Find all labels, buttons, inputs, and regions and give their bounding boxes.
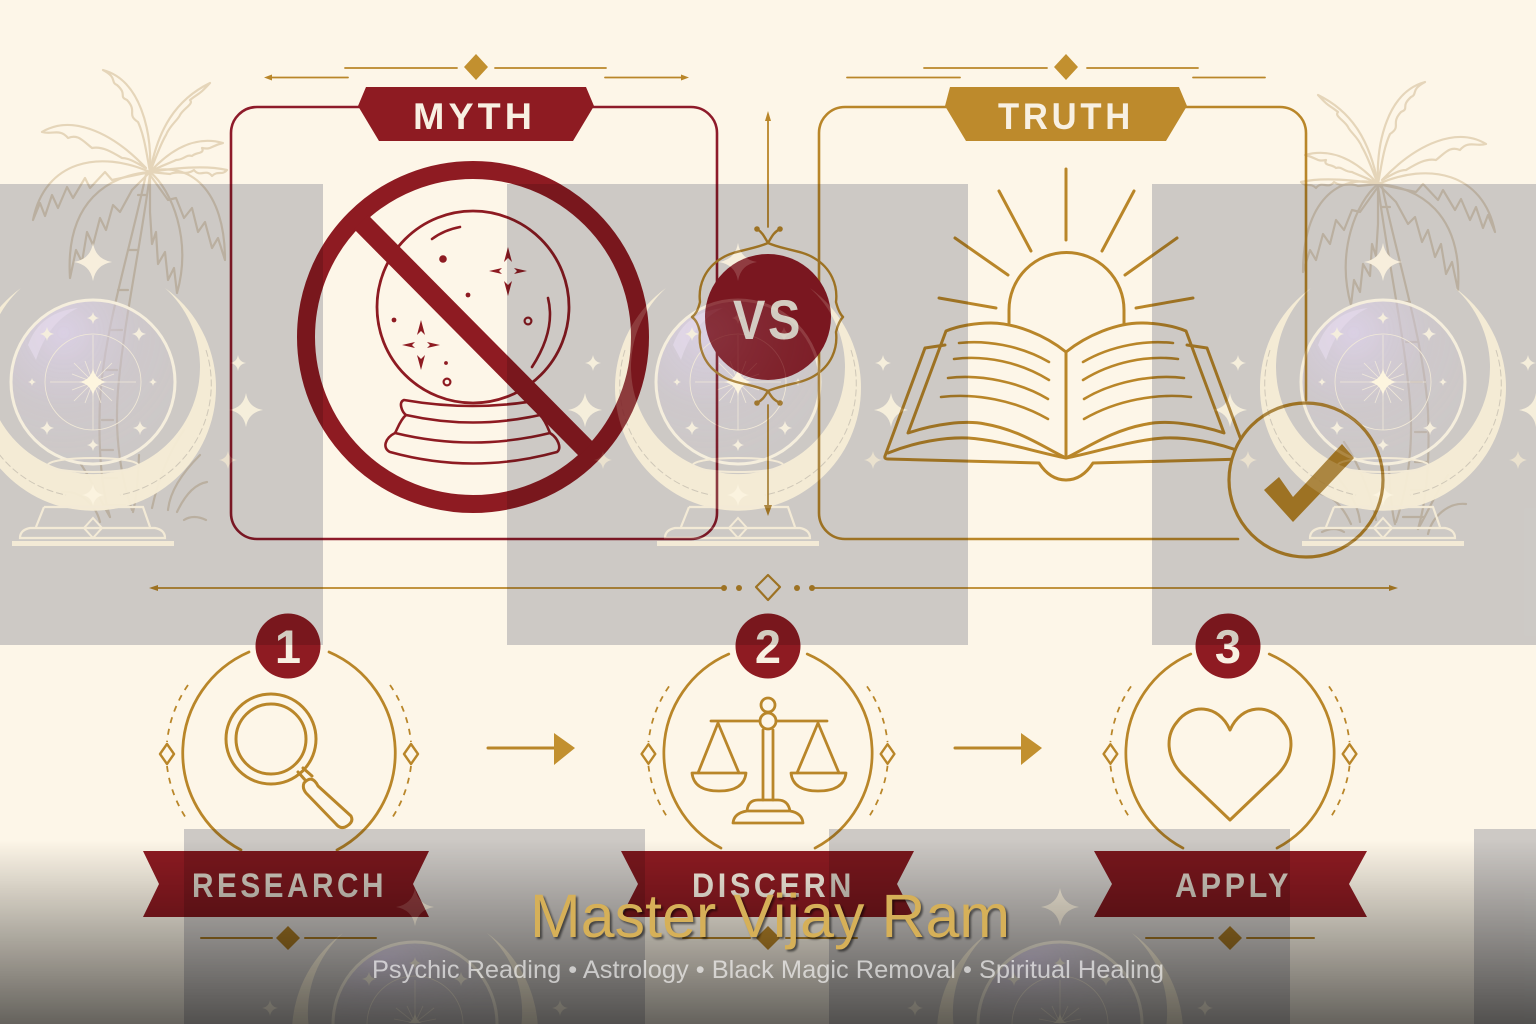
- step 2 ribbon: [621, 851, 914, 917]
- arrow: research to discern: [488, 733, 575, 765]
- step 2 badge: 2: [755, 620, 781, 673]
- horizontal divider: [149, 575, 1398, 600]
- step 3: apply: [1094, 614, 1367, 950]
- truth frame: [819, 107, 1306, 539]
- footer subtitle: Psychic Reading • Astrology • Black Magic Removal • Spiritual Healing: [372, 956, 1164, 984]
- step 2 ribbon: DISCERN: [692, 867, 855, 905]
- step 3 ornament: [1146, 926, 1314, 950]
- step 1 badge: [256, 614, 320, 678]
- bottom dark gradient footer: [0, 840, 1536, 1024]
- step 3 badge: 3: [1215, 620, 1241, 673]
- step 3 circle ornaments: [1104, 654, 1356, 848]
- icon: heart: [1169, 709, 1291, 820]
- icon: rising sun rays: [939, 169, 1193, 323]
- step 3 ribbon: [1094, 851, 1367, 917]
- step 3 badge: [1196, 614, 1260, 678]
- arrow: discern to apply: [955, 733, 1042, 765]
- icon: magnifying glass: [226, 694, 352, 828]
- icon: crystal ball: [377, 211, 569, 464]
- truth label: [945, 87, 1187, 141]
- watermark: right palm tree: [1301, 82, 1495, 534]
- step 1 ribbon: [143, 851, 429, 917]
- step 2 circle ornaments: [642, 654, 894, 848]
- step 2: discern: [621, 614, 914, 950]
- vs divider line: [764, 111, 772, 516]
- ornament above myth: [264, 54, 689, 80]
- watermark: crystal balls with crescent moons: [0, 243, 1536, 1024]
- vs medallion: VS: [733, 288, 803, 351]
- step 2 badge: [736, 614, 800, 678]
- icon: prohibition sign: [306, 170, 640, 504]
- icon: scales: [692, 698, 846, 823]
- step 1: research: [143, 614, 429, 950]
- myth label: MYTH: [413, 96, 536, 137]
- step 1 ribbon: RESEARCH: [192, 867, 387, 905]
- ornament above truth: [847, 54, 1265, 80]
- step 2 ornament: [683, 926, 857, 950]
- myth label: [358, 87, 594, 141]
- step 1 ornament: [201, 926, 376, 950]
- content tinted where the gray tiles cross it: [149, 184, 1398, 950]
- panel: truth: [819, 87, 1383, 557]
- watermark: left palm tree: [33, 70, 227, 522]
- step 3 ribbon: APPLY: [1175, 867, 1292, 905]
- myth frame: [231, 107, 717, 539]
- step 1 badge: 1: [275, 620, 301, 673]
- truth label: TRUTH: [998, 96, 1134, 137]
- icon: open book: [885, 323, 1247, 480]
- panel: myth: [231, 87, 717, 539]
- main content: [143, 54, 1398, 950]
- step 1 circle ornaments: [160, 652, 418, 850]
- watermark: faint overlay showing through the content: [0, 243, 1536, 1024]
- footer title: Master Vijay Ram: [530, 882, 1010, 950]
- vs medallion: [692, 226, 843, 406]
- icon: checkmark badge: [1229, 403, 1383, 557]
